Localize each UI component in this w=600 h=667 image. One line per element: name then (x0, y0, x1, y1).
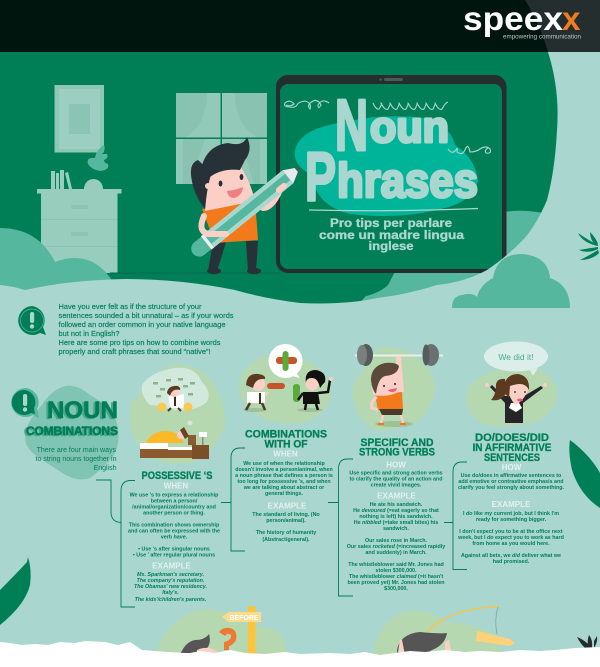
heading: do does did: IN AFFIRMATIVE (472, 442, 552, 454)
character with pencil (188, 137, 306, 274)
text: strong verbs: Use specific and strong action verbs (349, 470, 443, 476)
illustration: we did it: We did it! (498, 352, 534, 362)
text: possessive: WHEN (164, 482, 188, 490)
teal blob (295, 116, 478, 216)
text: combinations: doesn't involve a person/animal, when (235, 467, 333, 473)
text: possessive: The kids'/children's parents. (135, 597, 207, 603)
text: do does did: I do like my current job, but I think I'm (463, 511, 559, 517)
heading: do does did (472, 432, 552, 464)
text: combinations: EXAMPLE (268, 502, 307, 510)
subtitle: inglese (368, 239, 414, 253)
text: combinations: person/animal). (266, 518, 306, 524)
text: combinations: a noun phrase that defines a person is (235, 473, 333, 479)
text: combinations: general things. (265, 491, 304, 497)
text: possessive: The company's reputation. (137, 578, 205, 584)
text: strong verbs: He ate his sandwich. (370, 502, 423, 508)
cloud right (452, 254, 570, 308)
text: strong verbs: He nibbled (=take small bites) his (354, 520, 438, 526)
noun combinations icon (11, 388, 39, 418)
text: strong verbs: $300,000. (384, 586, 408, 592)
noun combinations text (36, 447, 117, 472)
logo: speexx: empowering communication (503, 34, 581, 40)
back hair (191, 160, 214, 210)
icon: leaf top right (578, 232, 599, 260)
heading: strong verbs: SPECIFIC AND (360, 437, 434, 449)
left hills (0, 228, 113, 295)
text: do does did: week, but I do expect you to work as hard (457, 535, 564, 541)
text: combinations: We use of when the relationship (243, 461, 326, 467)
noun combinations text: to string nouns together in (36, 456, 117, 463)
heading: combinations: COMBINATIONS (245, 428, 327, 440)
text: do does did: I don't expect you to be at the office next (459, 529, 563, 535)
noun combinations text: English (94, 465, 117, 472)
text: possessive: • Use 's after singular nouns (138, 546, 210, 552)
legs (208, 241, 258, 271)
text: strong verbs: nothing is left) his sandwich. (359, 514, 433, 520)
text: possessive: another person or thing. (143, 510, 205, 516)
text: do does did: ready for something bigger. (476, 517, 547, 523)
heading: do does did: DO/DOES/DID (475, 432, 549, 444)
text: do does did: clarify you feel strongly about something. (458, 485, 565, 491)
text: strong verbs: EXAMPLE (377, 492, 416, 500)
text: possessive: between a person/ (151, 498, 198, 504)
text: combinations: The history of humanity (256, 530, 316, 536)
illustration: combinations (239, 344, 333, 423)
heading: combinations (245, 428, 327, 450)
noun combinations blob (25, 386, 119, 479)
text: combinations: (Abstract/general). (262, 537, 310, 543)
noun combinations text: There are four main ways (37, 447, 116, 454)
text: do does did: from home as you would here. (472, 541, 550, 547)
text: possessive: and can often be expressed with the (128, 528, 220, 534)
bracket: possessive (96, 480, 135, 607)
text: combinations: we are talking about abstract or (243, 485, 324, 491)
text: strong verbs: and suddenly) in March. (365, 550, 427, 556)
text: strong verbs: He devoured (=eat eagerly so that (353, 508, 439, 514)
text: possessive: /animal/organization/country and (132, 504, 216, 510)
icon: leaf left (0, 557, 31, 625)
tablet (276, 75, 506, 273)
text: do does did: HOW (502, 463, 522, 472)
text: possessive: Italy's. (162, 590, 179, 596)
text: strong verbs: Our sales rose in March. (365, 538, 428, 544)
text: possessive (128, 482, 220, 603)
text: possessive: Ms. Sparkman's secretary. (137, 572, 205, 578)
text: strong verbs: The whistleblower said Mr. Jones had (348, 562, 444, 568)
intro text: sentences sounded a bit unnatural – as if your words (58, 312, 234, 320)
torn paper bottom edge (0, 641, 600, 667)
window (176, 93, 267, 184)
top bar (0, 0, 600, 52)
front hair (200, 137, 250, 177)
title: Noun Phrases: hrases (337, 155, 478, 208)
icon: leaf right (569, 440, 600, 508)
pencil (188, 160, 306, 260)
intro text: but not in English? (58, 330, 120, 338)
text: do does did: add emotive or contrastive emphasis and (458, 479, 564, 485)
text: possessive: This combination shows ownership (129, 522, 220, 528)
subtitle: Pro tips per parlare (330, 216, 452, 230)
text: possessive: We use 's to express a relationship (130, 492, 219, 498)
back arm (263, 190, 280, 208)
bracket: combinations (221, 448, 245, 551)
intro text (58, 303, 234, 356)
intro text: Here are some pro tips on how to combine words (58, 339, 221, 347)
text: combinations (235, 450, 333, 543)
text: strong verbs: create vivid images. (371, 482, 422, 488)
picture frame (54, 85, 104, 152)
illustration: before sign: BEFORE (229, 615, 259, 622)
text: strong verbs: to clarify the quality of an action and (350, 476, 442, 482)
illustration: fishing rod (373, 606, 515, 660)
text: possessive: verb have. (161, 534, 188, 540)
hero room background (0, 52, 600, 320)
heading: noun combinations: NOUN (47, 397, 118, 424)
illustration: strong verbs (352, 344, 443, 430)
floor line (110, 272, 280, 274)
subtitle (319, 216, 464, 253)
icon: plant bottom right (577, 635, 597, 648)
text: strong verbs: The whistleblower claimed (=it hasn't (349, 574, 443, 580)
heading: possessive: POSSESSIVE ‘S (142, 470, 212, 482)
text: combinations: too long for possessive 's, and when (237, 479, 331, 485)
shirt (202, 200, 258, 243)
face (219, 180, 222, 186)
illustration: possessive (130, 364, 225, 464)
intro text: properly and craft phrases that sound “native”! (58, 348, 211, 356)
text: strong verbs: Our sales rocketed (=increased rapidly (347, 544, 445, 550)
text: strong verbs: been proved yet) Mr. Jones had stolen (347, 580, 445, 586)
text: combinations: The standard of living. (No (252, 512, 320, 518)
intro text: followed an order common in your native language (58, 321, 226, 329)
text: strong verbs: sandwich. (383, 526, 409, 532)
intro text: Have you ever felt as if the structure of your (58, 303, 202, 311)
heading: noun combinations (26, 397, 118, 438)
text: do does did: Against all bets, we did deliver what we (461, 553, 561, 559)
swirls (285, 100, 490, 154)
heading: strong verbs: STRONG VERBS (359, 446, 435, 458)
title: Noun Phrases (305, 86, 478, 215)
heading: combinations: WITH OF (264, 438, 308, 450)
text: possessive: EXAMPLE (152, 562, 192, 570)
title: Noun Phrases: P (305, 138, 336, 215)
illustration: before sign (155, 606, 286, 666)
title: Noun Phrases: oun (370, 103, 449, 152)
heading: strong verbs (359, 437, 435, 458)
text: do does did: Use do/does in affirmative sentences to (461, 473, 562, 479)
text: strong verbs: stolen $300,000. (376, 568, 417, 574)
title underline (309, 208, 478, 211)
text: do does did (457, 463, 565, 565)
text: possessive: The Obamas' new residency. (134, 584, 207, 590)
hands (201, 216, 226, 234)
logo: speexx: x (562, 0, 581, 37)
intro icon (18, 306, 46, 335)
bracket: do does did (444, 462, 467, 570)
head (205, 166, 255, 211)
text: do does did: EXAMPLE (492, 500, 531, 509)
text: possessive: • Use ' after regular plural nouns (133, 552, 215, 558)
logo: speexx: speex (463, 0, 564, 37)
text: strong verbs: HOW (386, 460, 406, 470)
heading: do does did: SENTENCES (484, 452, 540, 464)
subtitle: come un madre lingua (319, 228, 464, 242)
text: strong verbs (347, 460, 445, 592)
heading: noun combinations: COMBINATIONS (26, 426, 118, 438)
dresser with books and plant (37, 145, 122, 273)
title: Noun Phrases: N (335, 86, 368, 166)
text: do does did: had promised. (493, 559, 530, 565)
illustration: we did it (466, 342, 557, 426)
bracket: strong verbs (328, 459, 353, 596)
text: combinations: WHEN (273, 450, 298, 458)
